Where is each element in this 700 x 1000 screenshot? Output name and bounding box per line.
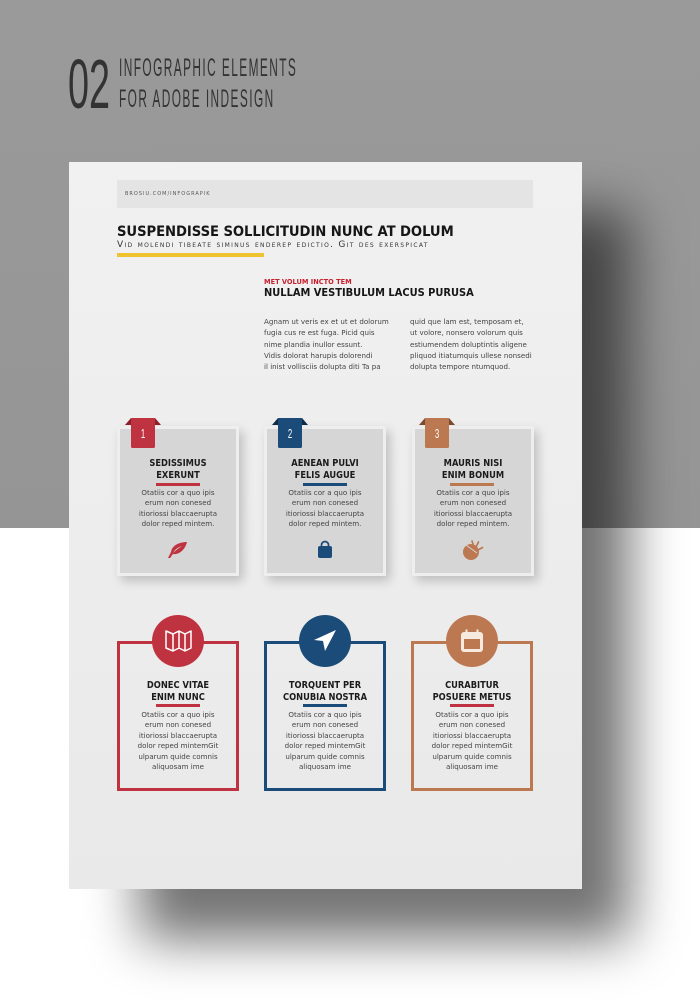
card 2 heading: AENEAN PULVI bbox=[291, 458, 359, 469]
box 1 heading bbox=[147, 680, 209, 703]
paragraph left column: Agnam ut veris ex et ut et dolorum bbox=[264, 317, 389, 326]
card 2 heading: FELIS AUGUE bbox=[295, 470, 355, 481]
card 1 text: dolor reped mintem. bbox=[142, 519, 214, 528]
card 1 number: 1 bbox=[141, 426, 145, 441]
card 1 rule bbox=[156, 483, 200, 486]
box 1 text: ulparum quide comnis bbox=[138, 752, 218, 761]
card 2 number: 2 bbox=[288, 426, 292, 441]
card 3 ribbon bbox=[419, 418, 455, 448]
paragraph left column bbox=[264, 317, 389, 371]
yellow rule bbox=[117, 253, 264, 257]
card 1 text: itioriossi blaccaerupta bbox=[139, 509, 217, 518]
box 1 text: aliquosam ime bbox=[152, 762, 204, 771]
box 1 text: dolor reped mintemGit bbox=[138, 741, 218, 750]
paragraph right column: ut volore, nonsero volorum quis bbox=[410, 328, 523, 337]
box 1 text: erum non conesed bbox=[145, 720, 211, 729]
icon: padlock bbox=[318, 540, 332, 558]
box 1 text: itioriossi blaccaerupta bbox=[139, 731, 217, 740]
box 1 rule bbox=[156, 704, 200, 707]
icon: leaf bbox=[168, 542, 187, 558]
section heading: NULLAM VESTIBULUM LACUS PURUSA bbox=[264, 287, 474, 299]
paragraph left column: Vidis dolorat harupis dolorendi bbox=[264, 351, 372, 360]
card 2 panel bbox=[264, 426, 386, 576]
card 1 heading: SEDISSIMUS bbox=[149, 458, 207, 469]
card 3 heading: MAURIS NISI bbox=[444, 458, 502, 469]
card 2 text: Otatiis cor a quo ipis bbox=[288, 488, 362, 497]
url bar bbox=[117, 180, 533, 208]
paragraph right column: estiumendem doluptintis aligene bbox=[410, 340, 527, 349]
card 3 text: Otatiis cor a quo ipis bbox=[436, 488, 510, 497]
card 1 heading: EXERUNT bbox=[156, 470, 200, 481]
paragraph left column: il inist vollisciis dolupta diti Ta pa bbox=[264, 362, 381, 371]
card 1 ribbon bbox=[125, 418, 161, 448]
box 2 text bbox=[285, 710, 366, 771]
box 2 rule bbox=[303, 704, 347, 707]
background: grey upper band bbox=[0, 0, 700, 528]
card 2 bbox=[263, 418, 395, 586]
paragraph right column bbox=[410, 317, 532, 371]
box 3 frame bbox=[411, 641, 533, 791]
icon: calendar in circle bbox=[446, 615, 498, 667]
card 3 text: erum non conesed bbox=[440, 498, 506, 507]
main heading: SUSPENDISSE SOLLICITUDIN NUNC AT DOLUM bbox=[117, 223, 454, 240]
title text bbox=[119, 54, 297, 113]
card 3 rule bbox=[450, 483, 494, 486]
box 2 bbox=[264, 615, 386, 791]
box 1 bbox=[117, 615, 239, 791]
box 3 text bbox=[432, 710, 512, 771]
card 2 ribbon bbox=[272, 418, 308, 448]
red kicker: MET VOLUM INCTO TEM bbox=[264, 277, 352, 286]
card 2 rule bbox=[303, 483, 347, 486]
box 3 text: aliquosam ime bbox=[446, 762, 498, 771]
box 1 text: Otatiis cor a quo ipis bbox=[141, 710, 215, 719]
card 1 text bbox=[139, 488, 217, 528]
document page bbox=[69, 162, 582, 889]
paragraph left column: fugia cus re est fuga. Picid quis bbox=[264, 328, 375, 337]
card 2 text bbox=[286, 488, 364, 528]
box 3 text: erum non conesed bbox=[439, 720, 505, 729]
box 3 text: dolor reped mintemGit bbox=[432, 741, 512, 750]
card 1 heading bbox=[149, 458, 207, 481]
box 2 heading: TORQUENT PER bbox=[289, 680, 361, 691]
box 3 text: Otatiis cor a quo ipis bbox=[435, 710, 509, 719]
box 2 text: itioriossi blaccaerupta bbox=[286, 731, 364, 740]
card 1 bbox=[116, 418, 248, 586]
box 3 heading bbox=[433, 680, 511, 703]
card 1 panel bbox=[117, 426, 239, 576]
box 1 frame bbox=[117, 641, 239, 791]
paragraph right column: quid que lam est, temposam et, bbox=[410, 317, 524, 326]
card 2 heading bbox=[291, 458, 359, 481]
box 3 heading: POSUERE METUS bbox=[433, 692, 511, 703]
box 2 heading bbox=[283, 680, 367, 703]
paragraph right column: dolupta tempore ntumquod. bbox=[410, 362, 510, 371]
card 3 heading bbox=[442, 458, 504, 481]
box 2 text: dolor reped mintemGit bbox=[285, 741, 365, 750]
title number: 02 bbox=[68, 45, 110, 123]
paragraph right column: pliquod itiatumquis ullese nonsedi bbox=[410, 351, 532, 360]
icon: map in circle bbox=[152, 615, 204, 667]
card 3 panel bbox=[412, 426, 534, 576]
box 1 text bbox=[138, 710, 218, 771]
box 2 text: ulparum quide comnis bbox=[285, 752, 365, 761]
box 3 heading: CURABITUR bbox=[445, 680, 499, 691]
card 2 text: dolor reped mintem. bbox=[289, 519, 361, 528]
box 2 heading: CONUBIA NOSTRA bbox=[283, 692, 367, 703]
box 2 text: erum non conesed bbox=[292, 720, 358, 729]
card 1 text: Otatiis cor a quo ipis bbox=[141, 488, 215, 497]
icon: navigation arrow in circle bbox=[299, 615, 351, 667]
box 3 rule bbox=[450, 704, 494, 707]
card 2 text: itioriossi blaccaerupta bbox=[286, 509, 364, 518]
box 2 text: Otatiis cor a quo ipis bbox=[288, 710, 362, 719]
box 2 text: aliquosam ime bbox=[299, 762, 351, 771]
subheading: Vid molendi tibeate siminus enderep edictio. Git des exerspicat bbox=[117, 240, 429, 250]
title text: FOR ADOBE INDESIGN bbox=[119, 85, 275, 113]
box 1 heading: DONEC VITAE bbox=[147, 680, 209, 691]
card 1 text: erum non conesed bbox=[145, 498, 211, 507]
paragraph left column: nime plandia inullor essunt. bbox=[264, 340, 363, 349]
box 3 text: itioriossi blaccaerupta bbox=[433, 731, 511, 740]
card 3 number: 3 bbox=[435, 426, 439, 441]
card 3 text bbox=[434, 488, 512, 528]
card 3 text: dolor reped mintem. bbox=[437, 519, 509, 528]
box 3 text: ulparum quide comnis bbox=[432, 752, 512, 761]
title text: INFOGRAPHIC ELEMENTS bbox=[119, 54, 297, 82]
box 3 bbox=[411, 615, 533, 791]
card 3 heading: ENIM BONUM bbox=[442, 470, 504, 481]
card 3 text: itioriossi blaccaerupta bbox=[434, 509, 512, 518]
url bar: BROSIU.COM/INFOGRAPIK bbox=[125, 191, 211, 197]
card 3 bbox=[411, 418, 543, 586]
box 2 frame bbox=[264, 641, 386, 791]
box 1 heading: ENIM NUNC bbox=[151, 692, 205, 703]
icon: acorn bbox=[463, 540, 484, 560]
card 2 text: erum non conesed bbox=[292, 498, 358, 507]
